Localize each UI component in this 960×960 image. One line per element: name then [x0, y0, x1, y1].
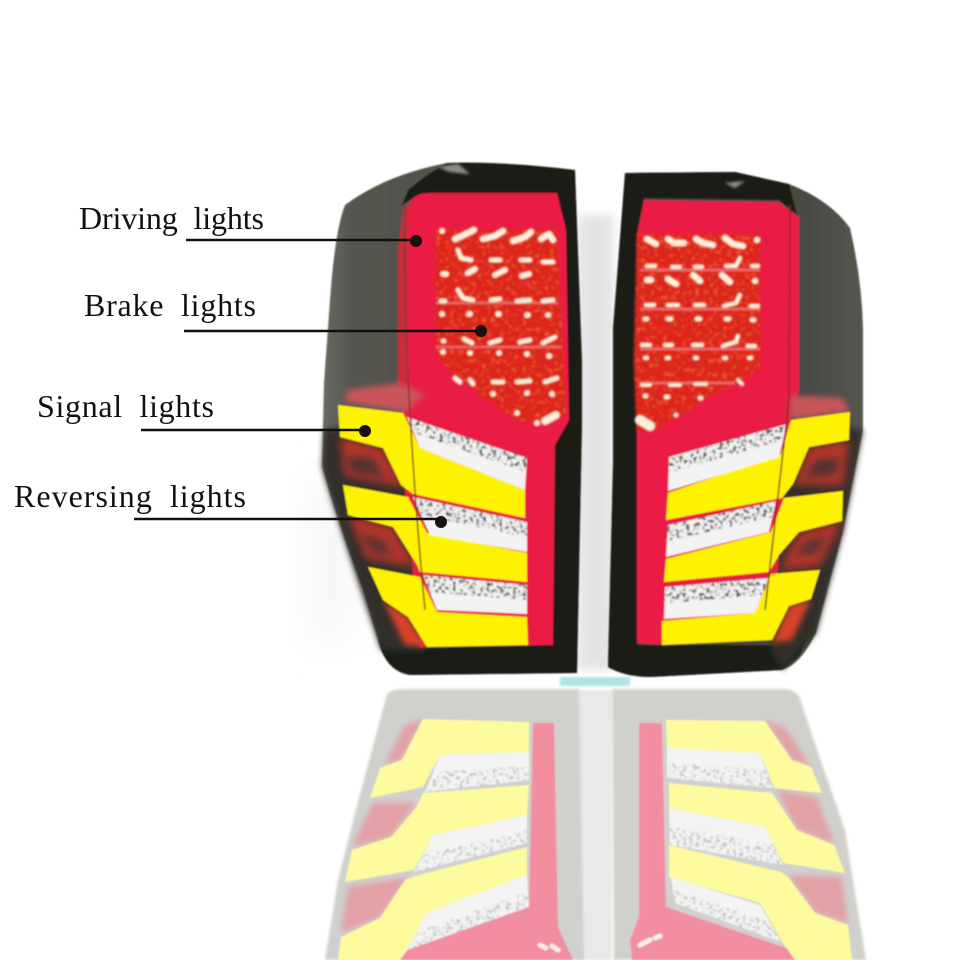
- left tail lamp: [322, 163, 582, 675]
- signal bars: [338, 405, 528, 647]
- red glow band 3: [383, 600, 427, 647]
- reflected right signal bars: [666, 720, 852, 960]
- housing seam line: [765, 205, 790, 610]
- top highlight: [438, 164, 470, 174]
- brake LED panel: [634, 234, 760, 434]
- reflected right panel speckle: [667, 762, 783, 942]
- LED row bars: [436, 303, 562, 347]
- reversing light panels: [407, 417, 527, 614]
- reflected left reversing panels: [407, 752, 529, 950]
- reflected left housing: [325, 689, 584, 960]
- left lamp black frame: [378, 163, 582, 675]
- reflected left panel speckle: [407, 766, 529, 950]
- callout: reversing lights: [14, 478, 447, 528]
- callout: brake lights: [84, 287, 487, 337]
- housing seam line: [405, 205, 425, 610]
- right lamp black frame: [608, 172, 806, 677]
- dark glow centres: [345, 456, 394, 555]
- red glow band 1: [793, 440, 849, 486]
- brake LED hotspots: [441, 230, 557, 423]
- callout: driving lights: Driving lights: [79, 200, 264, 236]
- upper glow on housing: [790, 395, 850, 420]
- left lamp housing: [322, 163, 582, 675]
- red light guide: [398, 193, 569, 647]
- reflected right red glows: [765, 721, 848, 923]
- LED row bars: [640, 270, 760, 383]
- reflected right red guide: [630, 723, 795, 960]
- red glow band 2: [779, 521, 842, 570]
- red left strip: [398, 205, 408, 385]
- upper glow on housing: [345, 383, 425, 412]
- signal bars: [662, 412, 850, 645]
- red glow band 1: [340, 437, 405, 487]
- top highlight: [725, 181, 745, 188]
- right tail lamp: [608, 172, 863, 677]
- callout: signal lights: Signal lights: [37, 388, 214, 424]
- reflected left signal bars: [338, 719, 529, 960]
- dark glow centres: [794, 458, 840, 556]
- lower housing shadow: [322, 415, 425, 650]
- reflected left hotspots: [540, 945, 558, 950]
- brake LED hotspots: [640, 238, 758, 426]
- reflected right housing: [612, 689, 866, 960]
- red glow band 3: [772, 599, 811, 643]
- callout: signal lights: [37, 388, 371, 437]
- reflected left red guide: [400, 723, 573, 960]
- reflection: left lamp: [325, 689, 584, 960]
- callout: driving lights: [79, 200, 422, 247]
- reflected left red glows: [341, 719, 423, 933]
- red light guide: [637, 200, 799, 645]
- red glow band 2: [348, 515, 417, 567]
- callout: reversing lights: Reversing lights: [14, 478, 246, 514]
- lower housing shadow: [770, 420, 863, 670]
- LED panel texture: [435, 230, 566, 422]
- callout: brake lights: Brake lights: [84, 287, 256, 323]
- reflection: right lamp: [612, 689, 866, 960]
- reversing light panels: [664, 424, 787, 619]
- LED panel texture: [634, 234, 760, 434]
- reflected right hotspots: [640, 936, 660, 945]
- brake LED panel: [435, 230, 566, 422]
- reflected right reversing panels: [667, 748, 783, 942]
- right lamp housing: [608, 172, 863, 677]
